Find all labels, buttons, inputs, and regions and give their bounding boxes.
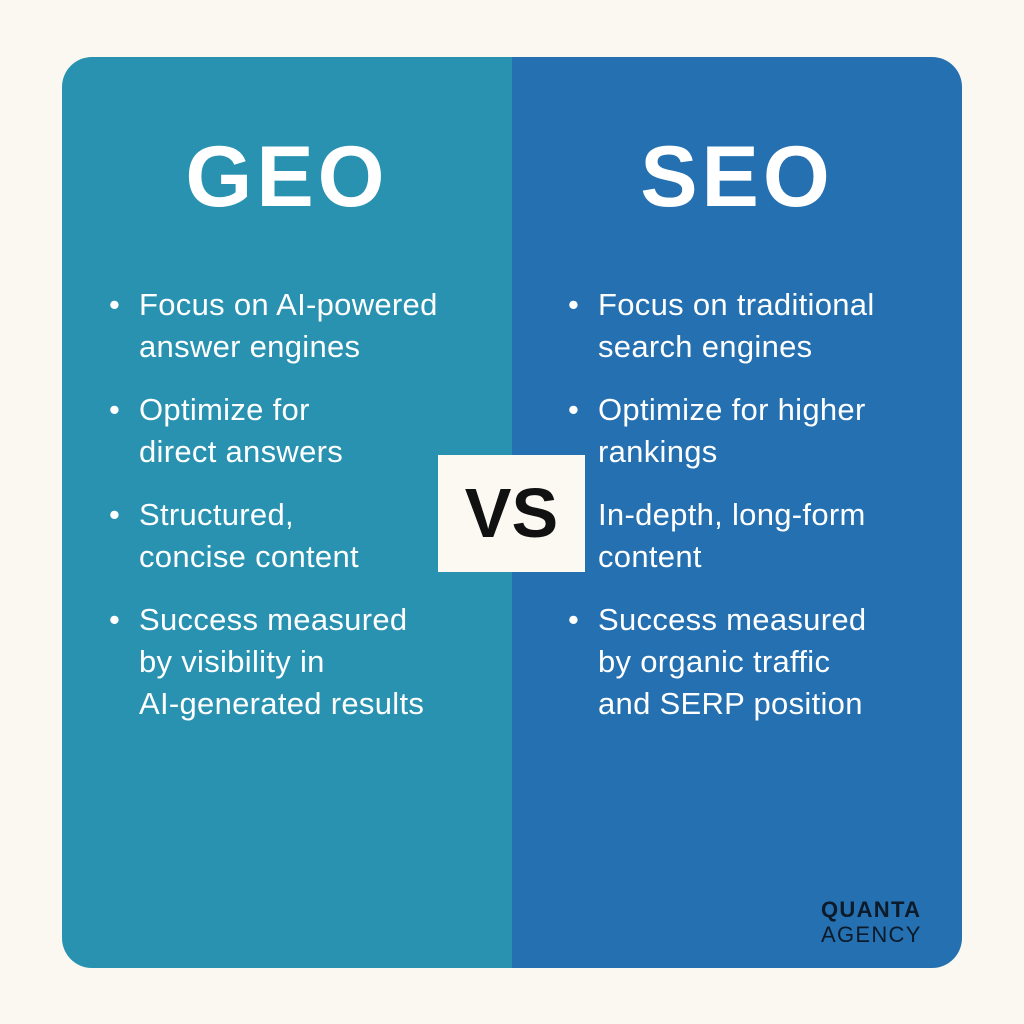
heading: GEO: GEO [185, 129, 389, 225]
panel: GEO: • [109, 497, 120, 532]
panel: GEO: • [109, 602, 120, 637]
SEO bullet list: and SERP position [598, 686, 863, 721]
logo: Quanta Agency: AGENCY [821, 922, 922, 947]
panel: GEO [62, 57, 512, 968]
GEO bullet list: answer engines [139, 329, 360, 364]
SEO bullet list: In-depth, long-form [598, 497, 866, 532]
GEO bullet list: Success measured [139, 602, 407, 637]
comparison card [62, 57, 962, 968]
logo: Quanta Agency [821, 897, 922, 947]
GEO bullet list: Focus on AI-powered [139, 287, 438, 322]
GEO bullet list: AI-generated results [139, 686, 424, 721]
GEO bullet list [109, 287, 438, 721]
SEO bullet list: search engines [598, 329, 812, 364]
GEO bullet list: direct answers [139, 434, 343, 469]
GEO bullet list: by visibility in [139, 644, 325, 679]
SEO bullet list: by organic traffic [598, 644, 830, 679]
SEO bullet list: Optimize for higher [598, 392, 866, 427]
panel: GEO: • [109, 392, 120, 427]
VS badge [438, 455, 585, 572]
heading: SEO: SEO [640, 129, 834, 225]
panel: SEO [512, 57, 962, 968]
panel: GEO: • [109, 287, 120, 322]
SEO bullet list: Success measured [598, 602, 866, 637]
panel: SEO: • [568, 602, 579, 637]
VS badge: VS [465, 474, 558, 552]
panel: SEO: • [568, 392, 579, 427]
GEO bullet list: Optimize for [139, 392, 310, 427]
SEO bullet list: rankings [598, 434, 718, 469]
SEO bullet list: Focus on traditional [598, 287, 875, 322]
logo: Quanta Agency: QUANTA [821, 897, 921, 922]
GEO bullet list: Structured, [139, 497, 294, 532]
SEO bullet list [568, 287, 875, 721]
SEO bullet list: content [598, 539, 702, 574]
GEO bullet list: concise content [139, 539, 359, 574]
panel: SEO: • [568, 287, 579, 322]
